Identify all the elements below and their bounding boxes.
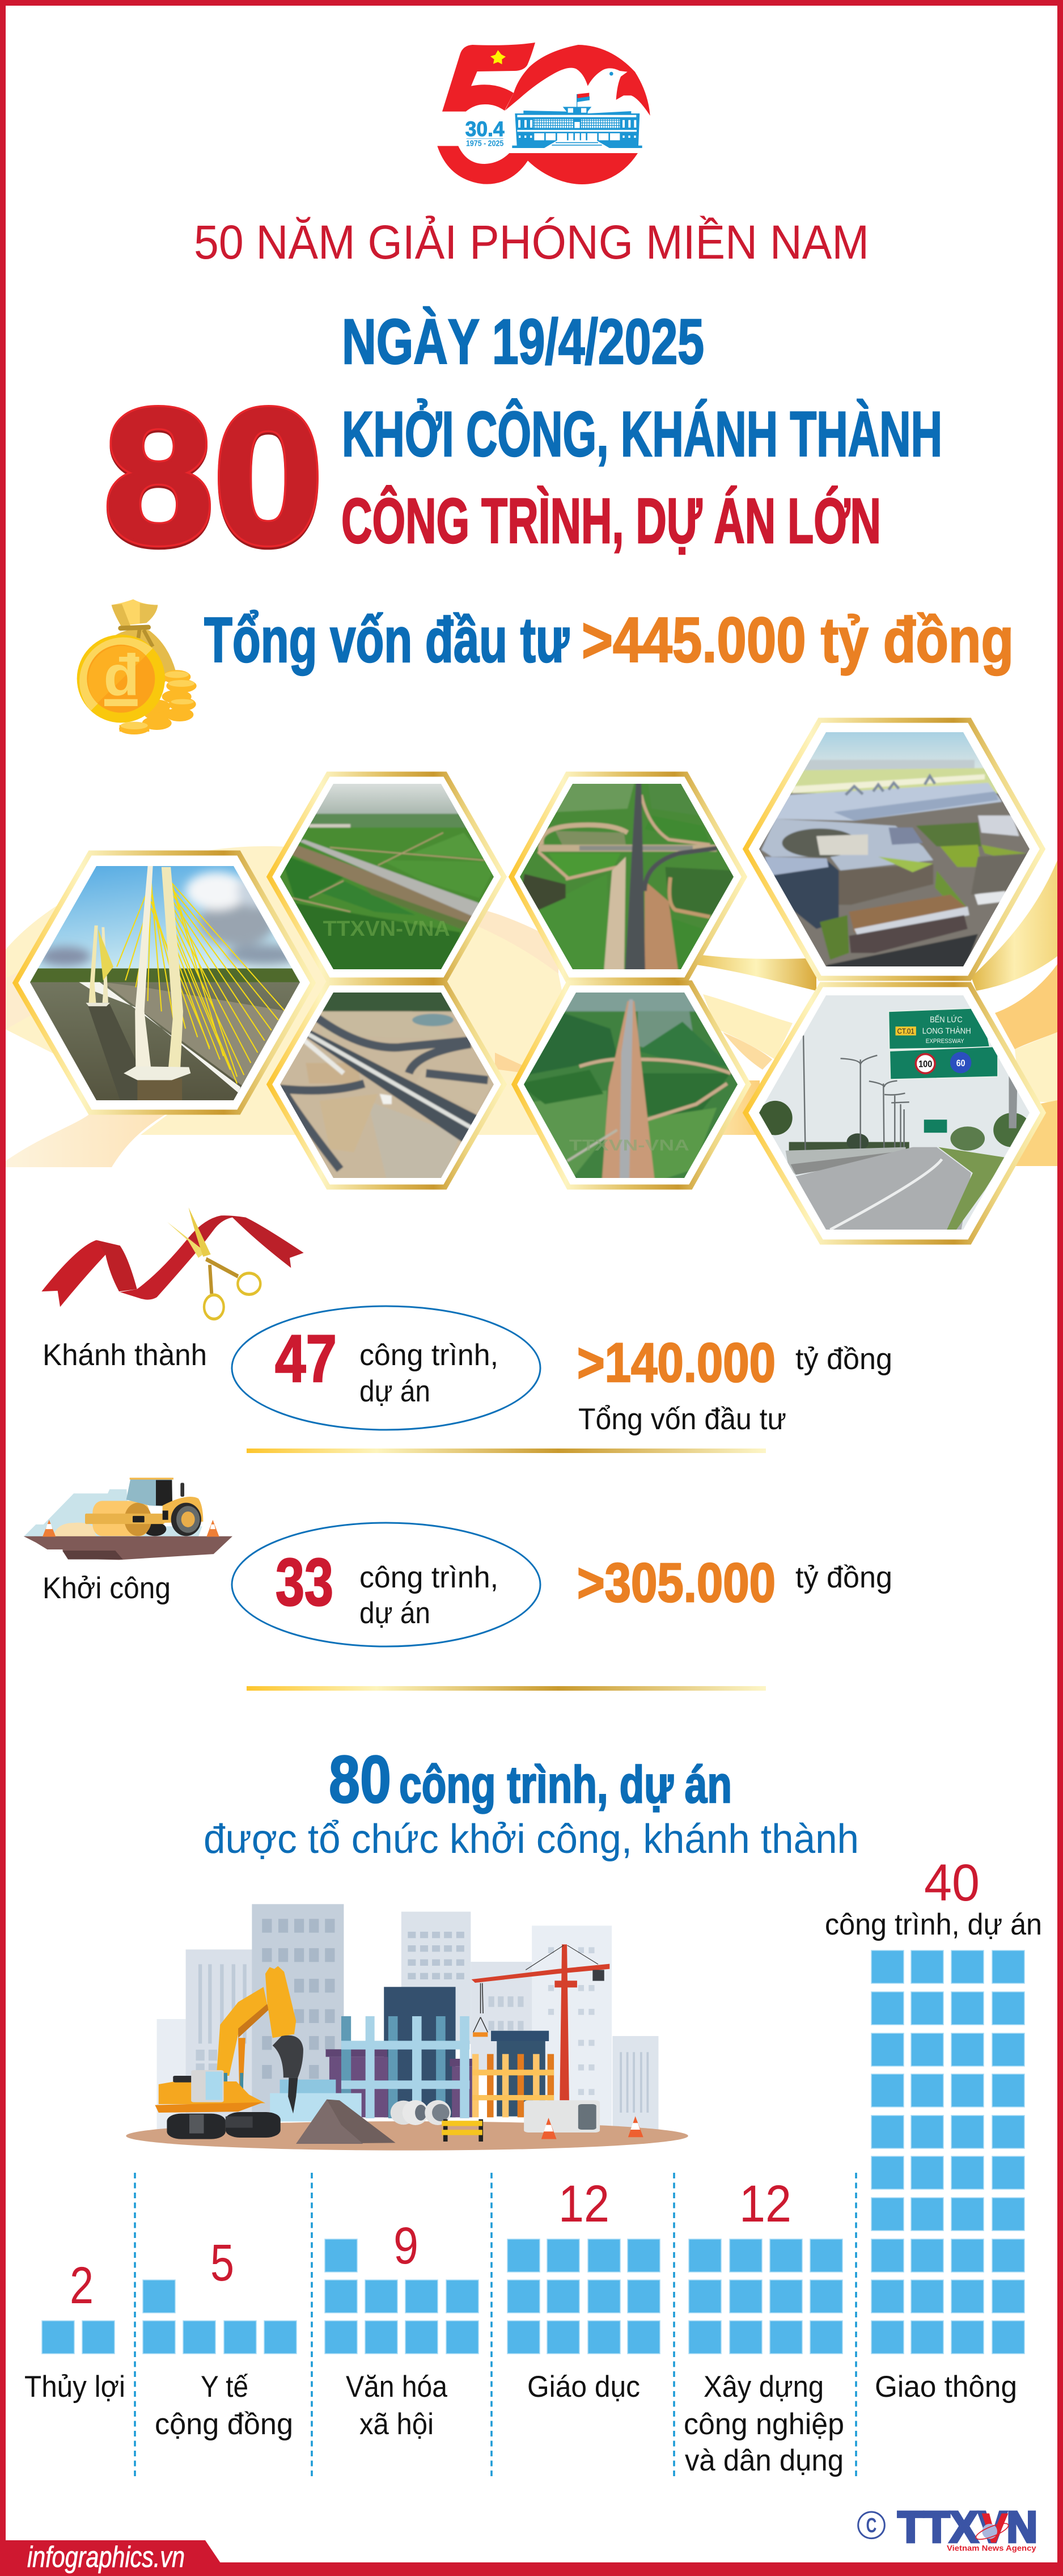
column: giao duc, 12 projects (507, 2175, 660, 2404)
logo: TTXVN Vietnam News Agency: Vietnam News Agency (947, 2543, 1036, 2552)
column: xay dung cong nghiep va dan dung, 12 projects: Xây dựng (704, 2370, 824, 2404)
column: van hoa xa hoi, 9 projects: xã hội (359, 2408, 434, 2441)
column: van hoa xa hoi, 9 projects: 9 (393, 2217, 418, 2275)
column: giao thong, 40 projects: Giao thông (875, 2370, 1017, 2404)
hexagon photo: road through green hills (514, 983, 748, 1187)
logo: 50 years: 30.4 (465, 117, 505, 141)
caption: tong von dau tu: Tổng vốn đầu tư (578, 1403, 786, 1436)
hexagon photo: expressway with road sign: 100 (918, 1058, 932, 1069)
hexagon photo: expressway with road sign: BẾN LỨC (930, 1015, 963, 1025)
hexagon photo: green fields and road (268, 774, 505, 980)
logo: 50 years: 1975 - 2025 (466, 140, 503, 149)
column: giao thong, 40 projects: 40 (924, 1854, 980, 1912)
section heading: 80 projects (329, 1742, 732, 1817)
hexagon photo: expressway with road sign: LONG THÀNH (922, 1027, 971, 1036)
big number 80: 80 (104, 369, 323, 583)
section heading: 80 projects: 80 (329, 1742, 391, 1817)
column: xay dung cong nghiep va dan dung, 12 projects: công nghiệp (684, 2408, 844, 2441)
column: xay dung cong nghiep va dan dung, 12 projects: 12 (739, 2175, 791, 2233)
icon: road roller (24, 1478, 232, 1560)
icon: money bag and coins: đ (104, 641, 139, 707)
label: khoi cong: Khởi công (43, 1572, 171, 1605)
unit: ty dong: tỷ đồng (795, 1561, 892, 1594)
panel: 47 projects ellipse (232, 1306, 540, 1430)
hexagon photo: interchange with overpass (269, 983, 504, 1187)
logo: TTXVN Vietnam News Agency: TTXVN (897, 2503, 1037, 2552)
panel: 47 projects ellipse: 47 (275, 1321, 337, 1396)
title: 50 nam: 50 NĂM GIẢI PHÓNG MIỀN NAM (194, 216, 869, 269)
unit: ty dong: tỷ đồng (795, 1342, 892, 1376)
section heading: 80 projects: công trình, dự án (399, 1756, 732, 1814)
big number 80: 80 (104, 369, 323, 583)
chart: project count blocks by sector (24, 1854, 1042, 2477)
column: xay dung cong nghiep va dan dung, 12 projects: và dân dụng (685, 2444, 844, 2477)
column: giao thong, 40 projects: công trình, dự án (825, 1908, 1042, 1941)
footer tab: infographics.vn: infographics.vn (27, 2541, 185, 2574)
icon: money bag and coins (77, 599, 197, 734)
panel: 33 projects ellipse: dự án (359, 1597, 430, 1630)
column: van hoa xa hoi, 9 projects: Văn hóa (346, 2370, 447, 2404)
section subheading: được tổ chức khởi công, khánh thành (204, 1817, 859, 1862)
hexagon photo: expressway with road sign (746, 985, 1043, 1242)
panel: 47 projects ellipse: công trình, (359, 1338, 498, 1372)
icon: red ribbon and golden scissors (41, 1207, 304, 1319)
value: 140.000: >140.000 (577, 1332, 776, 1393)
column: giao duc, 12 projects: 12 (558, 2175, 609, 2233)
hexagon photo: highway interchange in fields (511, 774, 748, 980)
column: thuy loi, 2 projects: Thủy lợi (24, 2370, 125, 2404)
panel: 33 projects ellipse (232, 1523, 540, 1646)
column: thuy loi, 2 projects: 2 (70, 2257, 94, 2315)
column: y te cong dong, 5 projects (143, 2234, 297, 2441)
panel: 47 projects ellipse: dự án (359, 1375, 430, 1408)
column: y te cong dong, 5 projects: cộng đồng (155, 2408, 293, 2441)
value: 305.000: >305.000 (577, 1552, 776, 1614)
column: y te cong dong, 5 projects: 5 (210, 2234, 234, 2292)
illustration: construction site (126, 1904, 688, 2151)
column: giao thong, 40 projects (825, 1854, 1042, 2404)
logo: TTXVN Vietnam News Agency: C (866, 2514, 876, 2537)
hexagon photo: green fields and road: TTXVN-VNA (323, 917, 450, 940)
hexagon photo: expressway with road sign: EXPRESSWAY (926, 1038, 964, 1045)
column: van hoa xa hoi, 9 projects (325, 2217, 478, 2441)
panel: 33 projects ellipse: công trình, (359, 1561, 498, 1594)
hexagon photo: cable-stayed bridge (15, 853, 313, 1112)
label: khanh thanh: Khánh thành (43, 1338, 207, 1372)
big number 80: 80 (104, 371, 323, 585)
hexagon photo: expressway with road sign: 60 (956, 1058, 965, 1069)
panel: 33 projects ellipse: 33 (276, 1545, 333, 1620)
logo: 50 years (437, 43, 650, 184)
total investment label: Tổng vốn đầu tư (204, 605, 570, 675)
column: y te cong dong, 5 projects: Y tế (201, 2370, 248, 2404)
hexagon photo: expressway with road sign: CT.01 (897, 1027, 914, 1036)
column: thuy loi, 2 projects (24, 2257, 125, 2404)
column: giao duc, 12 projects: Giáo dục (527, 2370, 640, 2404)
hexagon photo: airport terminal (746, 720, 1043, 978)
background ribbons (6, 846, 1057, 1167)
column: xay dung cong nghiep va dan dung, 12 projects (684, 2175, 844, 2477)
hexagon photo: road through green hills: TTXVN-VNA (569, 1137, 689, 1154)
heading: date: NGÀY 19/4/2025 (342, 306, 704, 377)
